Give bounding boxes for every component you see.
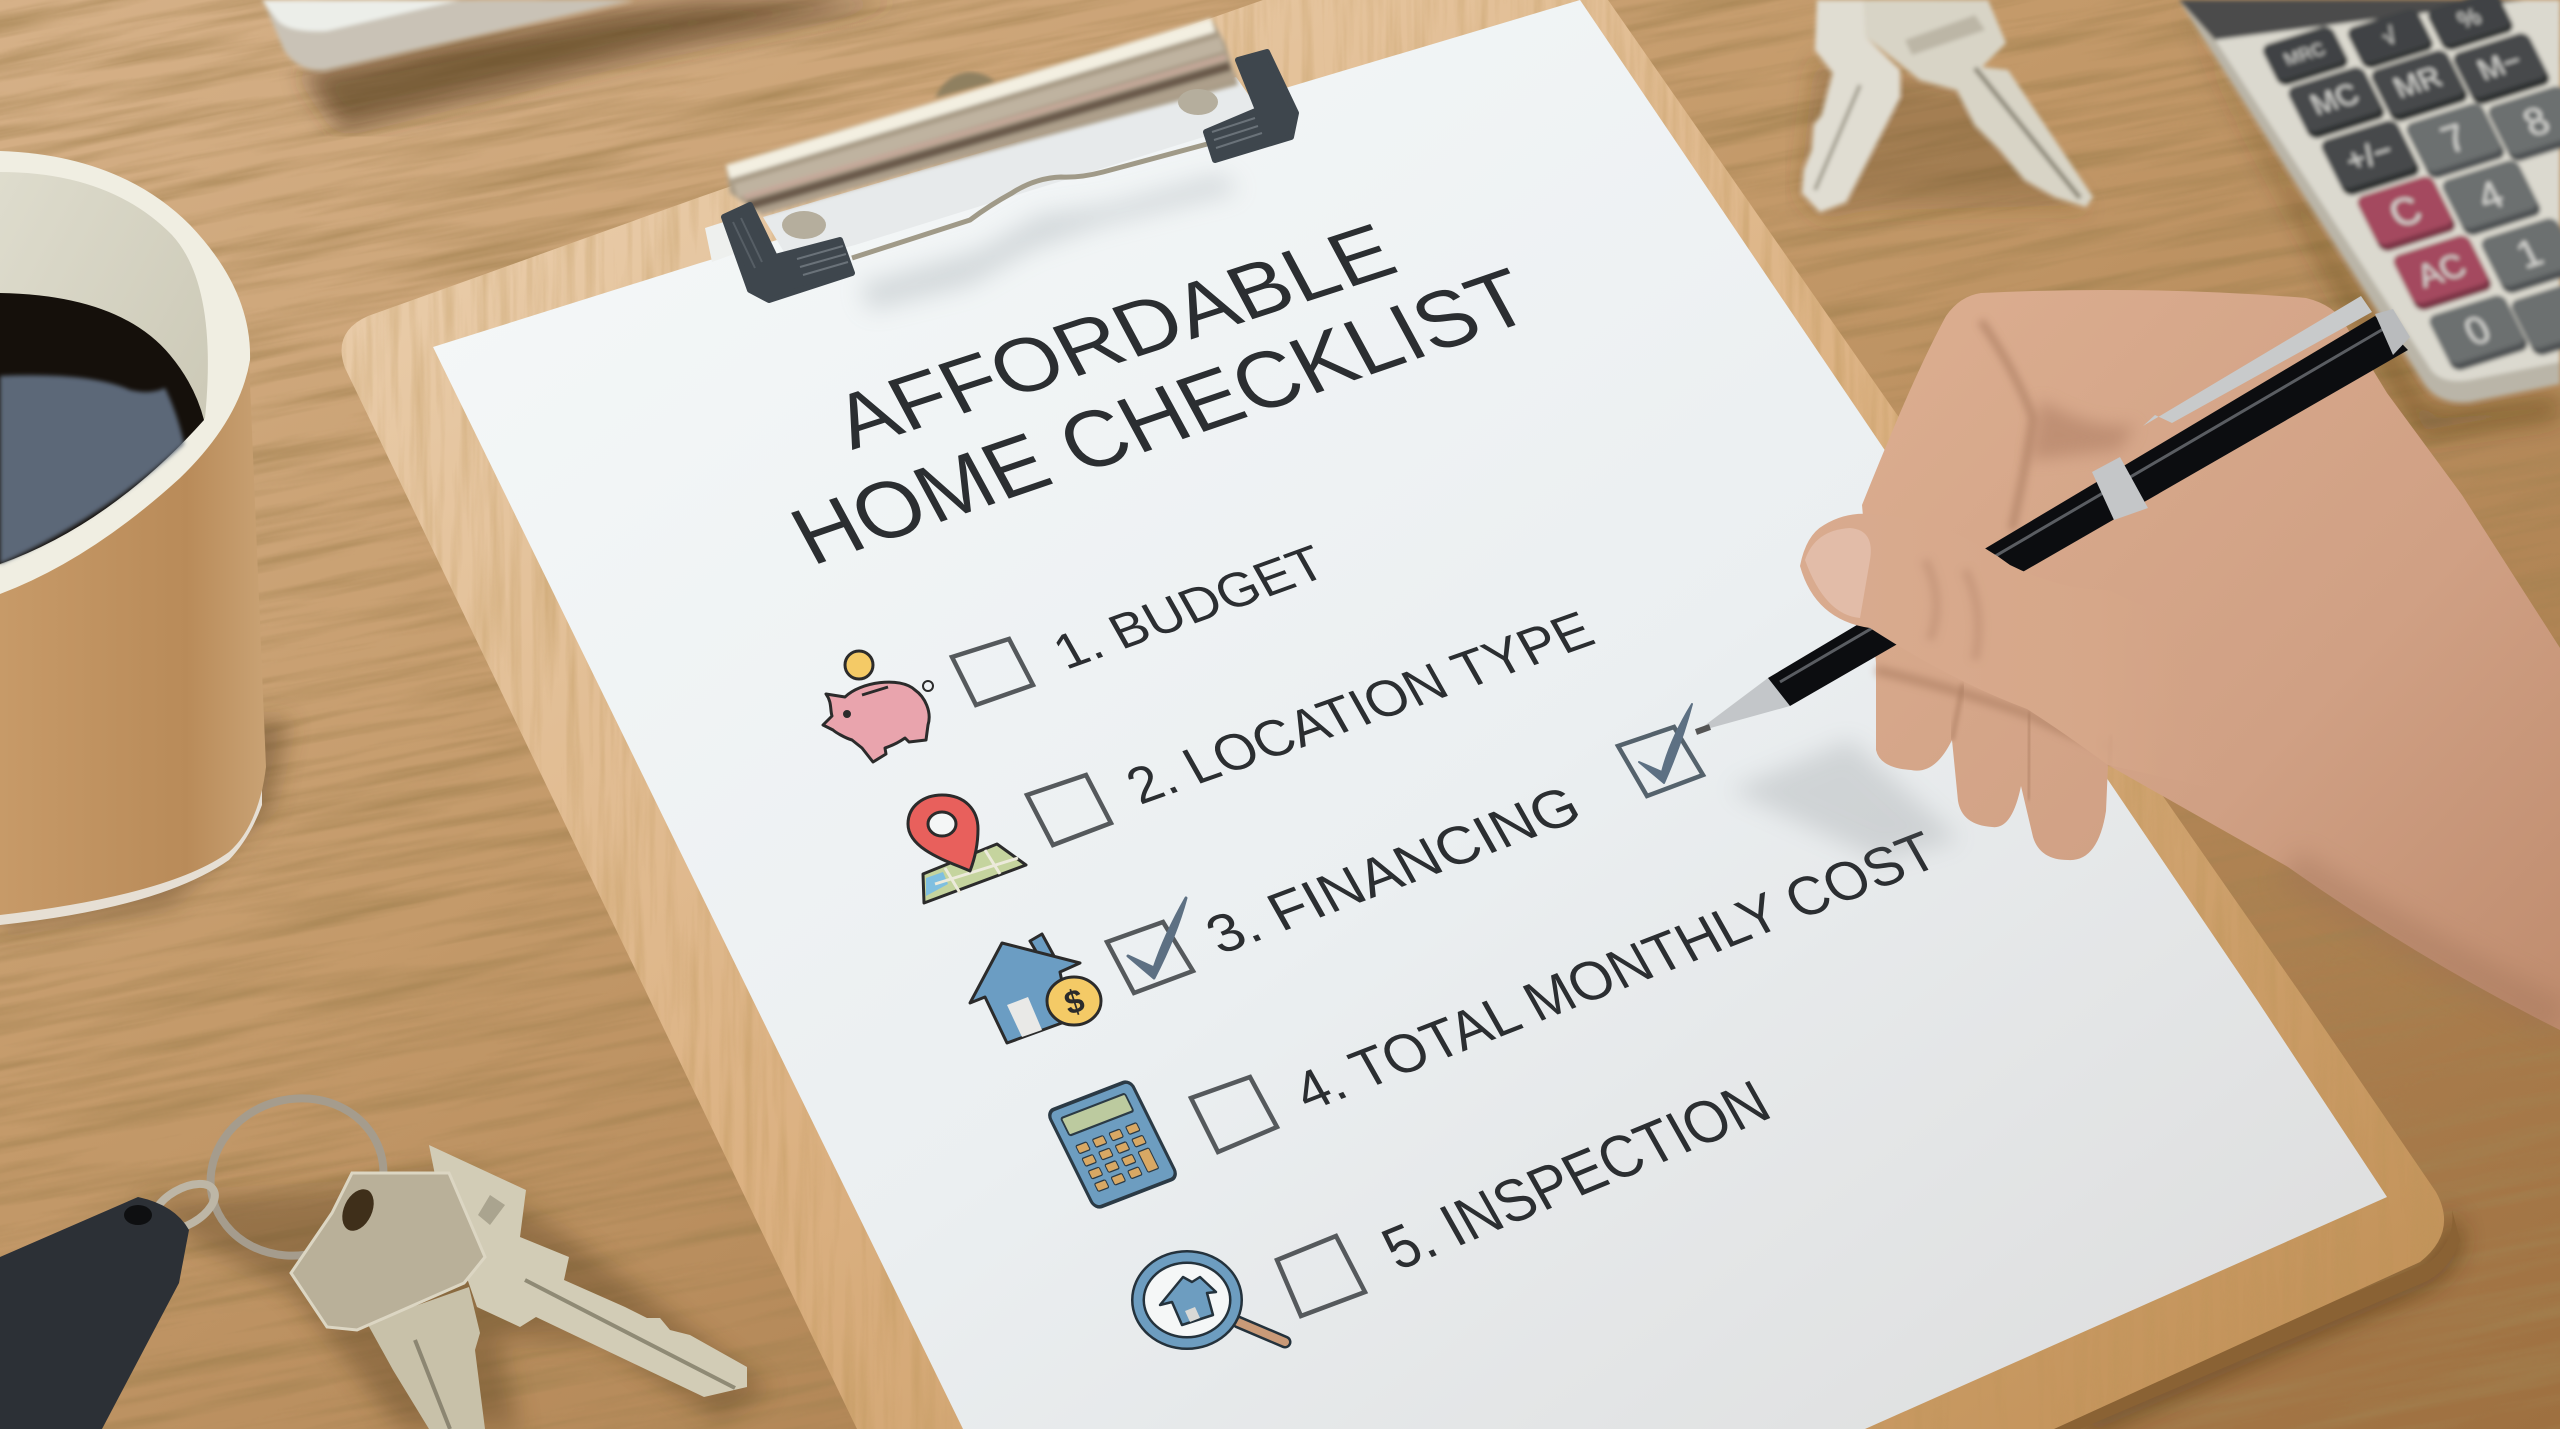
calculator keys: % xyxy=(2453,3,2486,34)
pen ring xyxy=(2092,457,2148,520)
label 1: 1. BUDGET xyxy=(1043,535,1335,680)
hand holding pen xyxy=(1696,290,2560,1030)
calculator keys: MRC xyxy=(2281,39,2329,69)
hand: palm and fingers xyxy=(1862,290,2560,1030)
key front blade xyxy=(367,1287,485,1429)
laptop corner xyxy=(262,0,900,130)
icon: piggy bank xyxy=(823,651,933,762)
clip rivets xyxy=(782,211,826,239)
checkbox 3 with check mark xyxy=(1107,898,1193,993)
fob hole xyxy=(124,1205,152,1225)
checkbox 1 xyxy=(952,639,1033,705)
checklist item 2: location type xyxy=(908,601,1604,903)
checklist item 4: total monthly cost xyxy=(1047,820,1948,1209)
calculator xyxy=(2179,0,2560,440)
calculator keys: 8 xyxy=(2516,99,2557,145)
calculator keys: 0 xyxy=(2457,308,2498,354)
clip wire xyxy=(852,143,1211,258)
checklist item 1: budget xyxy=(823,535,1335,762)
label 4: 4. TOTAL MONTHLY COST xyxy=(1283,820,1948,1123)
calculator keys: C xyxy=(2382,188,2429,236)
calculator keys: 4 xyxy=(2470,173,2511,219)
pen cap end xyxy=(2375,309,2410,355)
thumb xyxy=(1800,514,2220,790)
calculator keys: MR xyxy=(2388,61,2447,104)
clip plate xyxy=(763,77,1270,262)
icon: house with coin xyxy=(970,934,1101,1043)
clip rivet knob xyxy=(935,72,995,98)
pen xyxy=(1696,296,2410,732)
checkbox: checked mark by pen xyxy=(1618,704,1703,796)
checkbox 5 xyxy=(1277,1236,1365,1316)
calculator keys: M− xyxy=(2472,45,2527,87)
clip back tab xyxy=(705,220,745,262)
key front head xyxy=(291,1173,485,1330)
pen clip xyxy=(2143,296,2372,426)
checklist item 5: inspection xyxy=(1138,1068,1781,1343)
calculator keys: 1 xyxy=(2509,231,2550,277)
calculator keys: +/− xyxy=(2339,132,2399,178)
clip shadow on paper xyxy=(860,175,1240,310)
icon: magnifying glass over house xyxy=(1138,1257,1285,1343)
key back xyxy=(429,1145,747,1397)
checklist item 3: financing xyxy=(970,704,1703,1043)
icon: map pin xyxy=(908,795,1026,903)
key ring xyxy=(193,1079,401,1275)
clip right grip xyxy=(1206,52,1296,160)
calculator keys: 7 xyxy=(2434,116,2475,162)
label 5: 5. INSPECTION xyxy=(1371,1068,1781,1283)
label 2: 2. LOCATION TYPE xyxy=(1116,601,1604,815)
keys on table, top xyxy=(1800,0,2093,220)
calculator keys: AC xyxy=(2411,247,2473,295)
thumbnail xyxy=(1805,528,1871,618)
hand shadow on paper xyxy=(1730,740,1960,860)
title: HOME CHECKLIST xyxy=(776,251,1545,582)
clip metal band xyxy=(726,18,1238,213)
keys and fob, bottom left xyxy=(0,1079,770,1429)
icon: calculator xyxy=(1047,1080,1178,1209)
coffee cup xyxy=(0,151,290,930)
calculator keys: √ xyxy=(2377,22,2402,51)
small ring xyxy=(146,1174,222,1240)
label 3: 3. FINANCING xyxy=(1195,774,1591,965)
bulldog clip xyxy=(705,18,1296,300)
key hole xyxy=(336,1184,380,1236)
thumb crease xyxy=(1925,560,1978,660)
calculator keys: MC xyxy=(2305,78,2364,121)
title: AFFORDABLE xyxy=(818,207,1409,465)
finger shading xyxy=(1876,321,2560,1020)
coffee xyxy=(0,293,204,564)
calculator keys xyxy=(2260,0,2560,372)
car key fob xyxy=(0,1197,189,1429)
icon: house with coin: $ xyxy=(1060,981,1089,1022)
clip left grip xyxy=(724,205,852,300)
checkbox 2 xyxy=(1027,775,1111,845)
paper sheet xyxy=(433,0,2387,1429)
checkbox 4 xyxy=(1191,1077,1277,1152)
